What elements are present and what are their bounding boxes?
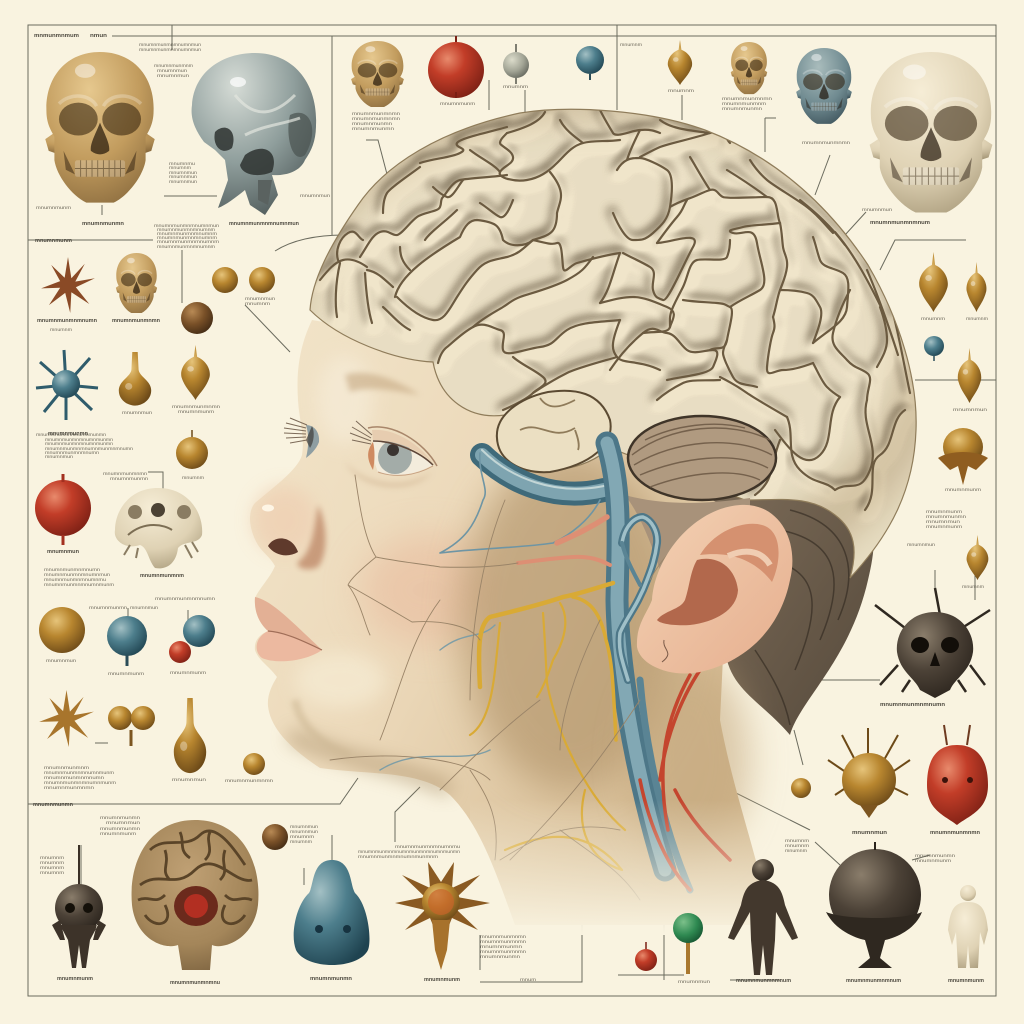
captions: small text blocks: mnumnmun xyxy=(169,174,198,179)
captions: small text blocks: mnumnmun xyxy=(300,193,331,198)
captions: small text blocks: mnumnm xyxy=(785,838,809,843)
captions: small text blocks: mnumnm xyxy=(290,839,312,844)
captions: small text blocks: mnumnmunmnmnumnmunmnm xyxy=(358,854,438,859)
gold beetle xyxy=(828,728,910,818)
sphere: grey xyxy=(503,44,529,84)
captions: small text blocks: mnumnmun xyxy=(45,454,74,459)
captions: small text blocks: mnumnm xyxy=(50,327,72,332)
blue vessels xyxy=(380,443,690,890)
captions: headings: mnumnmunmn xyxy=(33,802,74,808)
captions: small text blocks: mnumnmunmnmnumn xyxy=(44,567,101,572)
captions: small text blocks: mnumnm xyxy=(290,834,314,839)
captions: small text blocks: mnumnmun xyxy=(290,824,319,829)
captions: small text blocks: mnumnmun xyxy=(122,410,153,415)
small brown sphere xyxy=(262,824,288,850)
captions: small text blocks: mnumnmunmnmnumnmunmn xyxy=(36,432,106,437)
dark horned skull xyxy=(875,588,990,698)
blue sphere small xyxy=(183,615,215,647)
captions: small text blocks: mnumnmunmn xyxy=(352,126,395,131)
captions: headings: mnumnmunmnmnum xyxy=(736,978,791,984)
captions: small text blocks: mnumnmunmnmnumn xyxy=(155,596,216,601)
blue ornament xyxy=(107,616,147,666)
captions: small text blocks: mnumnmunmnmnumnmun xyxy=(139,47,202,52)
captions: headings: mnumnmun xyxy=(852,830,888,836)
nose shading xyxy=(253,486,326,569)
captions: small text blocks: mnumnmunmnmnumn xyxy=(44,775,105,780)
captions: small text blocks: mnumnmun xyxy=(169,170,198,175)
orange sunburst xyxy=(395,862,490,970)
brain xyxy=(309,108,917,578)
captions: small text blocks: mnumnmunmnmn xyxy=(480,949,527,954)
captions: small text blocks: mnumnm xyxy=(962,584,984,589)
captions: small text blocks: mnumnmunmnmnumn xyxy=(45,450,100,455)
green sphere on stem xyxy=(673,913,703,974)
captions: small text blocks: mnumnm xyxy=(40,855,64,860)
captions: small text blocks: mnumnmunmnmnumnmunmn xyxy=(45,441,113,446)
red sphere small xyxy=(169,641,191,663)
captions: small text blocks: mnumnm xyxy=(668,88,694,93)
brain specimen brown xyxy=(132,820,258,970)
dark humanoid xyxy=(728,859,798,975)
captions: headings: mnumnmunmnmn xyxy=(112,318,161,324)
captions: small text blocks: mnumnmunmnmn xyxy=(480,934,527,939)
captions: small text blocks: mnumnmun xyxy=(862,207,893,212)
captions: small text blocks: mnumnmunm xyxy=(945,487,981,492)
captions: small text blocks: mnumnm xyxy=(182,475,204,480)
arteries xyxy=(518,517,730,890)
captions: small text blocks: mnumnmunmn xyxy=(480,944,523,949)
dark skull figure xyxy=(52,845,106,968)
captions: small text blocks: mnumnmunmn xyxy=(100,815,141,820)
captions: small text blocks: mnumnmunmnmnumnm xyxy=(157,231,217,236)
small ball xyxy=(791,778,811,798)
captions: small text blocks: mnumnmunmn xyxy=(722,106,763,111)
spheres: small gold pair xyxy=(212,267,275,293)
captions: small text blocks: mnumnm xyxy=(785,848,807,853)
blue creature xyxy=(294,860,369,965)
captions: small text blocks: mnumnmunmn xyxy=(110,476,149,481)
captions: small text blocks: mnum xyxy=(520,977,536,982)
captions: small text blocks: mnumnmunmnmn xyxy=(44,785,95,790)
dark bomb xyxy=(826,842,922,968)
captions: small text blocks: mnumnmun xyxy=(130,605,159,610)
captions: headings: mnumnmunmnmnum xyxy=(846,978,901,984)
hair behind the ear xyxy=(700,470,874,735)
captions: small text blocks: mnumnmunm xyxy=(36,205,71,210)
fruit: red top xyxy=(428,36,484,98)
temporal lobe xyxy=(497,391,611,472)
captions: small text blocks: mnumnmunmnmn xyxy=(352,116,401,121)
captions: small text blocks: mnumnmun xyxy=(290,829,319,834)
gold spiked star xyxy=(39,690,94,747)
head and neck xyxy=(250,320,874,925)
captions: small text blocks: mnumnm xyxy=(620,42,642,47)
gold creature right xyxy=(938,428,988,485)
captions: headings: mnumnmunmnmnumn xyxy=(880,702,946,708)
skull: grey side view xyxy=(192,53,316,215)
sphere small brown gold xyxy=(243,753,265,775)
sphere: brown xyxy=(181,302,213,334)
captions: headings: mnumnmunmnmnu xyxy=(170,980,220,986)
captions: headings: mnumnmunmn xyxy=(48,431,89,437)
captions: headings: mnumnmunmnmn xyxy=(930,830,981,836)
captions: small text blocks: mnumnmunmnmnumnmunm xyxy=(44,770,114,775)
captions: small text blocks: mnumnmunmnmnumnm xyxy=(157,244,215,249)
captions: small text blocks: mnumnmunmnmnumnm xyxy=(157,239,219,244)
captions: small text blocks: mnumnmunmnmnumnmunmn xyxy=(45,437,113,442)
skull: small top row xyxy=(351,41,404,107)
captions: small text blocks: mnumnmun xyxy=(245,296,276,301)
hair strands above the ear xyxy=(625,495,750,570)
captions: small text blocks: mnumnmunmnmnumnmunmnmnumnmunmn xyxy=(358,849,460,854)
captions: headings: mnumnmunmnmnum xyxy=(870,220,930,226)
captions: small text blocks: mnumnmunmnm xyxy=(44,765,89,770)
captions: small text blocks: mnumnmunmnm xyxy=(722,101,766,106)
captions: small text blocks: mnumnmunmnmnumnmun xyxy=(139,42,202,47)
captions: headings: mnumnmun xyxy=(47,549,80,555)
captions: headings: mnumnmunm xyxy=(57,976,93,982)
captions: small text blocks: mnumnmunmnm xyxy=(154,63,193,68)
captions: headings: mnmunmnmum xyxy=(34,33,79,39)
gold top xyxy=(181,345,210,400)
captions: small text blocks: mnumnm xyxy=(169,165,191,170)
skin shading xyxy=(290,355,750,860)
blue sphere right xyxy=(924,336,944,361)
spiky star brown xyxy=(41,257,95,313)
yellow nerves xyxy=(470,583,625,870)
gold top right xyxy=(958,348,981,403)
skull: small tan xyxy=(731,42,767,94)
eyebrow xyxy=(345,373,420,395)
cerebellum xyxy=(628,416,776,500)
captions: small text blocks: mnumnmunmnmnumnmunm xyxy=(44,780,116,785)
captions: small text blocks: mnumnm xyxy=(785,843,809,848)
captions: small text blocks: mnumnmunmn xyxy=(926,514,967,519)
captions: small text blocks: mnumnmunm xyxy=(100,831,136,836)
captions: small text blocks: mnumnmun xyxy=(907,542,936,547)
captions: small text blocks: mnumnmun xyxy=(169,179,198,184)
fine nerves xyxy=(330,475,700,900)
lips xyxy=(255,597,322,661)
captions: small text blocks: mnumnmunmnmn xyxy=(225,778,274,783)
captions: small text blocks: mnumnmunmnmnumnmu xyxy=(44,577,107,582)
cerebrum outline xyxy=(310,109,916,578)
captions: small text blocks: mnumnmunm xyxy=(440,101,475,106)
captions: headings: mnumnmunmn xyxy=(310,976,353,982)
captions: small text blocks: mnumnmunmnmn xyxy=(802,140,851,145)
captions: small text blocks: mnumnmunmnmn xyxy=(480,939,527,944)
captions: small text blocks: mnumnmun xyxy=(157,68,188,73)
gold pointed ornament xyxy=(668,40,692,85)
ear xyxy=(637,505,792,673)
captions: headings: nmun xyxy=(90,33,108,39)
gold ornaments right xyxy=(919,252,948,312)
captions: small text blocks: mnumnm xyxy=(245,301,270,306)
captions: small text blocks: mnumnm xyxy=(40,860,64,865)
captions: small text blocks: mnumnmunmnmnumnmunmnmnumn xyxy=(45,446,134,451)
captions: headings: mnumnmunmn xyxy=(82,221,125,227)
captions: small text blocks: mnumnmun xyxy=(157,73,190,78)
red sphere bottom xyxy=(635,942,657,971)
captions: small text blocks: mnumnmunmnmnumnmun xyxy=(44,572,111,577)
pale figure xyxy=(948,885,988,968)
pale creature skull xyxy=(115,488,202,568)
captions: headings: mnumnmunm xyxy=(35,238,72,244)
captions: small text blocks: mnumnmunmnmnumnmu xyxy=(395,844,461,849)
captions: small text blocks: mnumnm xyxy=(921,316,945,321)
captions: small text blocks: mnumnmunmnmn xyxy=(722,96,773,101)
captions: small text blocks: mnumnmunm xyxy=(915,858,951,863)
face profile xyxy=(250,320,770,925)
captions: small text blocks: mnumnmunmn xyxy=(480,954,521,959)
blood vessels and nerves xyxy=(330,443,730,900)
near eye xyxy=(345,421,437,487)
captions: headings: mnumnmunmnm xyxy=(140,573,184,579)
gold ornament right small xyxy=(967,262,986,312)
captions: small text blocks: mnumnmunm xyxy=(926,524,962,529)
captions: headings: mnumnmunm xyxy=(424,977,460,983)
captions: small text blocks: mnumnmunmnmn xyxy=(172,404,221,409)
skull: slate xyxy=(796,48,852,124)
far eye xyxy=(284,418,319,458)
red creature xyxy=(927,725,988,825)
gold top lower right xyxy=(967,535,988,580)
captions: small text blocks: mnumnmun xyxy=(46,658,77,663)
captions: small text blocks: mnumnmun xyxy=(953,407,988,412)
captions: small text blocks: mnumnmunmn xyxy=(89,605,128,610)
captions: small text blocks: mnumnmun xyxy=(926,519,961,524)
gold flask xyxy=(119,352,151,406)
gold flask lower xyxy=(174,698,206,773)
captions: small text blocks: mnumnmunm xyxy=(178,409,214,414)
captions: small text blocks: mnumnm xyxy=(40,870,64,875)
captions: headings: mnumnmunmnmnumnmun xyxy=(229,221,300,227)
captions: small text blocks: mnumnmun xyxy=(172,777,207,782)
captions: small text blocks: mnumnmunmnmnumnmun xyxy=(154,223,220,228)
captions: small text blocks: mnumnmunmnmnumnm xyxy=(157,227,215,232)
captions: small text blocks: mnumnm xyxy=(503,84,528,89)
captions: small text blocks: mnumnmunmnmn xyxy=(352,111,401,116)
captions: small text blocks: mnumnmunm xyxy=(170,670,206,675)
captions: small text blocks: mnumnmun xyxy=(106,820,141,825)
captions: small text blocks: mnumnmunmn xyxy=(100,826,141,831)
blue spider xyxy=(36,350,98,420)
captions: small text blocks: mnumnm xyxy=(40,865,64,870)
sphere: blue xyxy=(576,46,604,80)
captions: small text blocks: mnumnmunm xyxy=(926,509,962,514)
captions: small text blocks: mnumnmunmn xyxy=(915,853,956,858)
captions: headings: mnumnmunmnmnumn xyxy=(37,318,98,324)
captions: small text blocks: mnumnmunm xyxy=(108,671,144,676)
gold sphere xyxy=(176,430,208,469)
neck fade xyxy=(470,800,790,935)
captions: headings: mnumnmunm xyxy=(948,978,984,984)
captions: small text blocks: mnumnmunmnmnumnm xyxy=(157,235,217,240)
captions: small text blocks: mnumnmun xyxy=(678,979,711,984)
gold sphere large xyxy=(39,607,85,653)
skull: left column xyxy=(116,253,157,313)
captions: small text blocks: mnumnmunmnmnumnmunm xyxy=(44,582,114,587)
gold twin spheres xyxy=(108,706,155,746)
red apple left xyxy=(35,474,91,545)
skull: large pale xyxy=(870,52,992,212)
captions: small text blocks: mnumnm xyxy=(966,316,988,321)
captions: small text blocks: mnumnmunmnmn xyxy=(103,471,148,476)
cerebrum with cortical folds xyxy=(310,110,916,576)
captions: small text blocks: mnumnmu xyxy=(169,161,196,166)
captions: small text blocks: mnumnmunmn xyxy=(352,121,393,126)
skull: gold front view xyxy=(45,52,155,203)
